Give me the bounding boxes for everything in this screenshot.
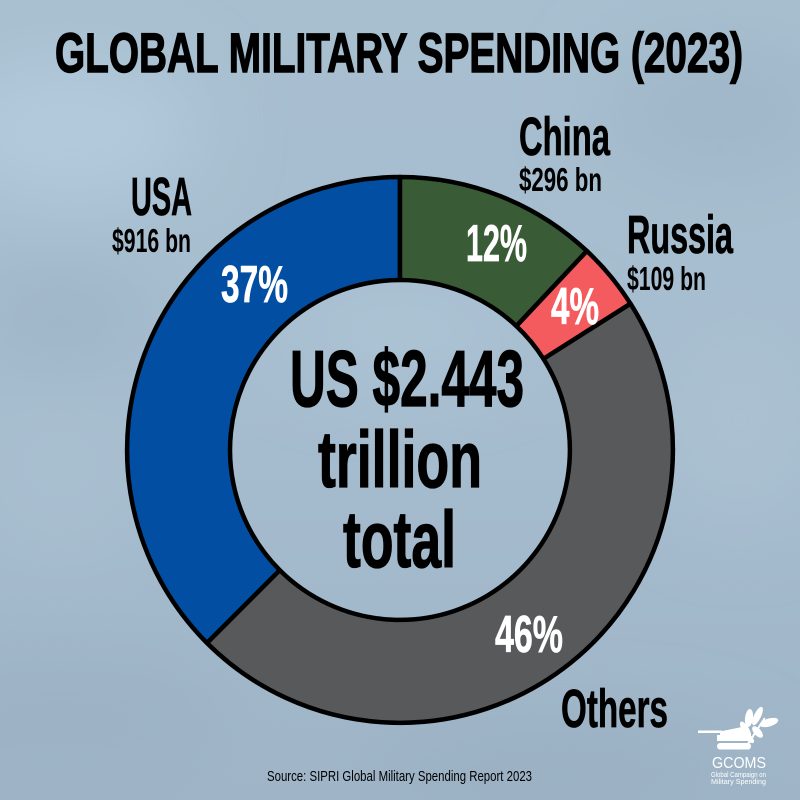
- label: USA: $916 bn: [112, 222, 191, 259]
- label: Russia: [627, 205, 734, 297]
- logo tagline: Military Spending: [711, 779, 766, 786]
- label: Russia: $109 bn: [627, 260, 706, 297]
- logo wordmark: GCOMS: [712, 755, 766, 772]
- percentage: Others 46%: 46%: [495, 606, 563, 664]
- centre total: [290, 334, 524, 584]
- label: USA: [112, 167, 192, 259]
- logo tagline: [711, 772, 766, 786]
- logo tagline: Global Campaign on: [711, 772, 766, 779]
- label: China: China: [519, 107, 611, 167]
- label: Russia: Russia: [627, 205, 734, 265]
- segment: Others 46%: [207, 304, 673, 723]
- donut chart: [127, 177, 673, 723]
- segment: USA 37%: [127, 177, 400, 643]
- centre total: total: [343, 495, 456, 584]
- logo: GCOMS: [698, 705, 779, 786]
- centre total: trillion: [318, 415, 482, 504]
- centre total: US $2.443: [290, 334, 524, 423]
- icon: tank with olive branch: [698, 705, 779, 750]
- percentage: China 12%: 12%: [466, 215, 527, 273]
- source note: Source: SIPRI Global Military Spending Report 2023: [267, 768, 532, 785]
- label: China: [519, 107, 611, 198]
- segment: China 12%: [400, 177, 587, 326]
- percentage: USA 37%: 37%: [221, 256, 288, 314]
- label: Others: Others: [561, 679, 668, 739]
- label: USA: USA: [131, 167, 192, 227]
- label: China: $296 bn: [519, 161, 602, 198]
- percentage: Russia 4%: 4%: [551, 278, 599, 336]
- segment: Russia 4%: [516, 251, 630, 359]
